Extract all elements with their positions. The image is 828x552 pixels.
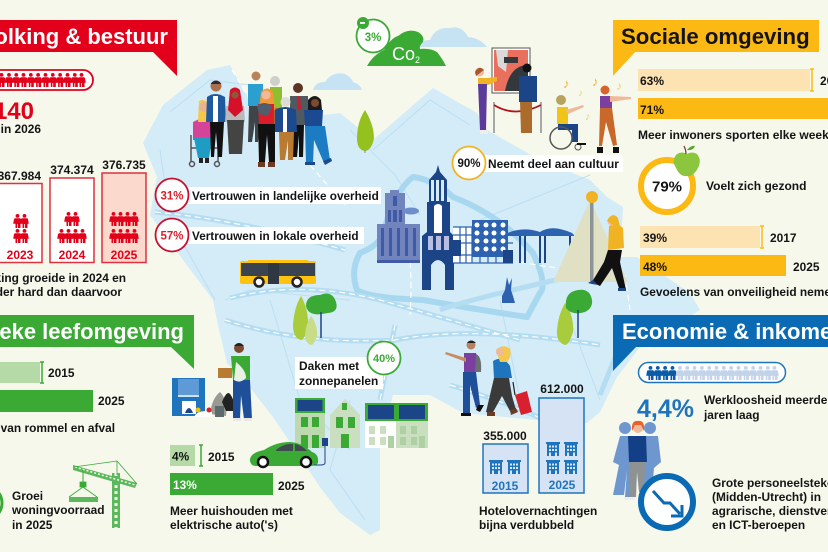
bar: rommel 2015: 2015 [48,366,75,380]
illustration: workers [613,421,661,500]
trees [293,110,592,345]
bar: electric car 2015 [170,445,235,466]
callout: roofs with solar panels [295,342,400,389]
bar: electric car 2015: 4% [172,450,190,464]
population bars by year: 374.374 [50,163,94,177]
chart: hotel stays [483,382,584,493]
callout: CO2: 3% [365,32,381,44]
older woman in blue [275,97,297,160]
callout: CO2: Co [392,44,415,64]
bar: sports 2025 [638,98,828,119]
illustration: group of residents [190,72,332,167]
stat: trust in national government: Vertrouwen in landelijke overheid [192,190,379,203]
chart: hotel stays: 612.000 [540,382,584,396]
music notes: ♪ [592,74,598,89]
illustration: tourists [445,340,532,416]
illustration: wheelchair user dancing [550,95,586,150]
clouds [313,27,487,90]
grid building [453,227,513,263]
panel: fysieke leefomgeving [0,315,194,532]
icon: construction crane [69,461,137,528]
Dom tower [422,165,454,290]
bar: unsafe 2025: 2025 [793,260,820,274]
icon: apple [674,146,700,176]
housing caption: Groei [12,489,43,503]
unemployment caption [703,393,828,422]
housing caption: in 2025 [12,518,53,532]
stat: trust in local government: Vertrouwen in lokale overheid [192,230,359,243]
bar: rommel 2025 [0,390,125,412]
donut: feeling healthy [641,160,693,212]
bar: electric car 2015: 2015 [208,450,235,464]
electric car caption: Meer huishouden met [170,504,293,518]
bar: unsafe 2017: 39% [643,231,667,245]
stat: trust in local government [156,218,364,252]
stat: trust in local government: 57% [160,230,184,242]
stat: culture participation: 90% [457,158,481,170]
music notes: ♪ [616,79,622,93]
chart: hotel stays: 355.000 [483,429,527,443]
chart: hotel stays: 2025 [549,478,576,492]
callout: CO2: 2 [415,55,420,65]
bar: unsafe 2017 [640,226,797,248]
bar: unsafe 2017: 2017 [770,231,797,245]
bar: rommel 2015 [0,362,75,383]
illustration: dancer [597,86,631,153]
callout: roofs with solar panels: Daken met [299,359,359,373]
heading banner: Sociale omgeving [621,24,810,49]
bar: unsafe 2025 [640,255,820,276]
red-haired woman with baby [257,88,275,167]
sports caption: Meer inwoners sporten elke week [638,128,828,142]
electric car caption [170,504,293,532]
illustration: Utrecht skyline [377,165,575,290]
chart: hotel stays: 2015 [492,479,519,493]
icon: declining arrow circle [641,476,693,528]
hotel caption: Hotelovernachtingen [479,504,597,518]
man in blue shirt [248,72,263,142]
labour shortage caption: (Midden-Utrecht) in [712,490,821,504]
bar: electric car 2025 [170,473,305,495]
panel: sociale omgeving [613,20,828,299]
labour shortage caption [712,476,828,532]
unemployment number: 4,4% [637,395,694,423]
unemployment pictogram pill [638,362,786,382]
illustration: walking woman [588,215,626,291]
dotted building [472,220,513,263]
man in grey suit [290,83,308,157]
woman in blue trousers [304,96,332,165]
woman in hijab [225,88,245,154]
map of Utrecht province [143,65,700,535]
stat: culture participation: Neemt deel aan cultuur [488,157,619,171]
illustration: street lamp with light cone [553,191,628,282]
bar: electric car 2025: 13% [173,478,197,492]
panel: economie en inkomen [613,315,828,532]
heading banner [613,315,828,371]
callout: roofs with solar panels: zonnepanelen [299,374,378,388]
population bars by year: 2023 [7,248,34,262]
illustration: electric car and charger [250,438,328,467]
canopy [505,228,575,263]
labour shortage caption: en ICT-beroepen [712,518,805,532]
growth caption [0,271,126,299]
hotel caption [479,504,597,532]
bar: sports 2025: 71% [640,103,664,117]
health caption: Voelt zich gezond [706,179,806,193]
music notes: ♪ [563,76,570,91]
heading banner [613,20,819,76]
bar: sports 2015: 63% [640,74,664,88]
housing caption [11,489,104,532]
illustration: houses with solar panels [295,398,428,448]
bar: sports 2015 [638,69,828,91]
stat: trust in national government [156,178,381,212]
icon: rabbit statue [502,277,515,303]
woman in wheelchair [190,100,220,166]
hotel caption: bijna verdubbeld [479,518,574,532]
electric car caption: elektrische auto('s) [170,518,278,532]
man in blazer [206,80,226,157]
stat: trust in national government: 31% [160,190,184,202]
bar: unsafe 2025: 48% [643,260,667,274]
music notes: ♪ [578,88,583,99]
bar: rommel 2025: 2025 [98,394,125,408]
callout: roofs with solar panels: 40% [373,353,395,365]
woman in green top [270,76,282,130]
icon: bus [240,260,316,286]
city hall [377,190,420,263]
music notes: ♪ [585,111,590,123]
illustration: visitors at art exhibition [475,48,541,134]
music notes [563,74,622,123]
callout: CO2 [356,17,446,66]
stat: culture participation [452,146,623,180]
illustration: container and litter [172,378,234,417]
population pictogram pill [0,70,93,90]
population bars by year [0,158,146,262]
illustration: person collecting litter [218,343,252,421]
panel: bevolking en bestuur [0,20,177,299]
housing caption: woningvoorraad [11,503,104,517]
housing growth ring [0,486,2,520]
unemployment caption: jaren laag [703,408,760,422]
heading banner [0,315,194,369]
heading banner [0,20,177,76]
donut: feeling healthy: 79% [652,178,682,196]
population bars by year: 2024 [59,248,86,262]
population bars by year: 2025 [111,248,138,262]
bar: electric car 2025: 2025 [278,479,305,493]
population bars by year: 376.735 [102,158,146,172]
